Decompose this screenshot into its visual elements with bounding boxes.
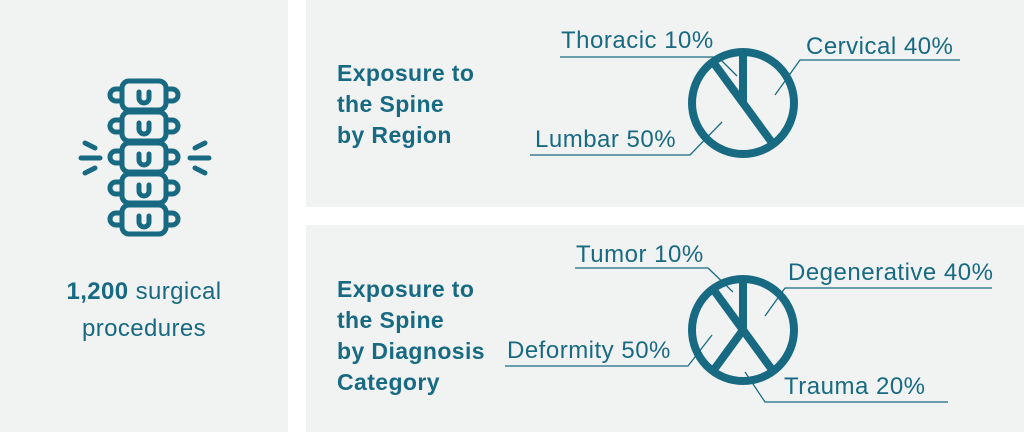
pie chart: diagnosis: Trauma 20% <box>784 373 926 400</box>
panel: region <box>306 0 1024 207</box>
panel: diagnosis <box>306 225 1024 432</box>
icon: spine <box>78 78 212 236</box>
heading: diagnosis: the Spine <box>337 307 444 333</box>
heading: region <box>337 60 474 148</box>
panel: left <box>0 0 288 432</box>
text: procedures <box>66 278 222 342</box>
heading: diagnosis <box>337 276 485 395</box>
pie chart: region <box>530 27 960 155</box>
text: procedures: 1,200 surgical <box>66 278 222 305</box>
heading: region: Exposure to <box>337 60 474 86</box>
pie chart: diagnosis: Degenerative 40% <box>788 259 993 286</box>
pie chart: diagnosis: Deformity 50% <box>507 337 671 364</box>
heading: diagnosis: Exposure to <box>337 276 474 302</box>
pie chart: diagnosis <box>505 241 993 402</box>
heading: diagnosis: by Diagnosis <box>337 338 485 364</box>
heading: diagnosis: Category <box>337 369 440 395</box>
pie chart: region: Cervical 40% <box>806 33 953 60</box>
pie chart: diagnosis: Tumor 10% <box>576 241 704 268</box>
heading: region: by Region <box>337 122 452 148</box>
text: procedures: procedures <box>82 315 206 342</box>
pie chart: region: Thoracic 10% <box>561 27 714 54</box>
heading: region: the Spine <box>337 91 444 117</box>
pie chart: region: Lumbar 50% <box>535 126 676 153</box>
